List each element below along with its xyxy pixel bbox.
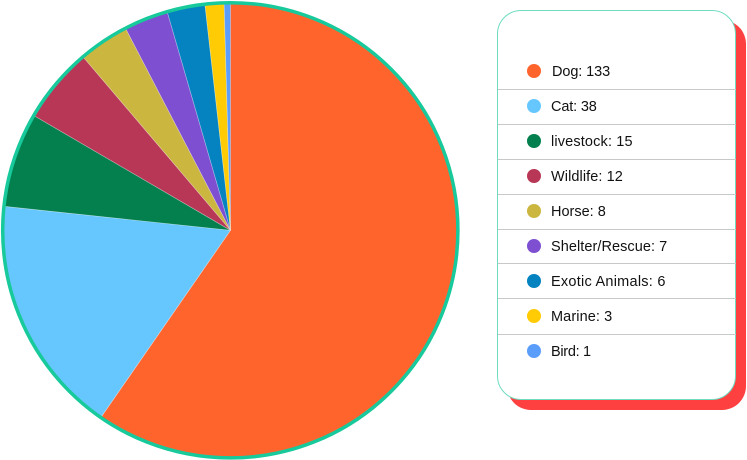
legend item: Horse: Horse: 8 bbox=[551, 204, 606, 220]
legend item: Exotic Animals: Exotic Animals: 6 bbox=[551, 274, 666, 290]
legend item: Wildlife: Wildlife: 12 bbox=[551, 169, 623, 185]
legend card bbox=[497, 10, 736, 400]
slice: Horse bbox=[83, 28, 230, 230]
legend item: Horse bbox=[527, 204, 606, 220]
legend item: Shelter/Rescue: Shelter/Rescue: 7 bbox=[551, 239, 667, 255]
legend item: Marine: Marine: 3 bbox=[551, 309, 612, 325]
pie outline bbox=[3, 3, 458, 458]
legend item: livestock: livestock: 15 bbox=[551, 134, 633, 150]
legend item: Bird: Bird: 1 bbox=[551, 344, 591, 360]
slice: livestock bbox=[4, 115, 230, 230]
slice: Bird bbox=[224, 2, 230, 230]
legend item: Dog: Dog: 133 bbox=[552, 64, 610, 80]
legend item: Cat bbox=[527, 99, 597, 115]
slice: Shelter/Rescue bbox=[125, 11, 230, 230]
legend item: Cat: Cat: 38 bbox=[551, 99, 597, 115]
slice: Cat bbox=[2, 206, 230, 418]
slice: Marine bbox=[205, 2, 230, 230]
legend item: Dog bbox=[527, 64, 610, 80]
pie chart bbox=[0, 1, 460, 460]
slice: Exotic Animals bbox=[167, 4, 230, 230]
legend item: Bird bbox=[527, 344, 591, 360]
slice: Wildlife bbox=[34, 57, 230, 230]
slice: Dog bbox=[101, 2, 458, 458]
card shadow bbox=[507, 20, 746, 410]
